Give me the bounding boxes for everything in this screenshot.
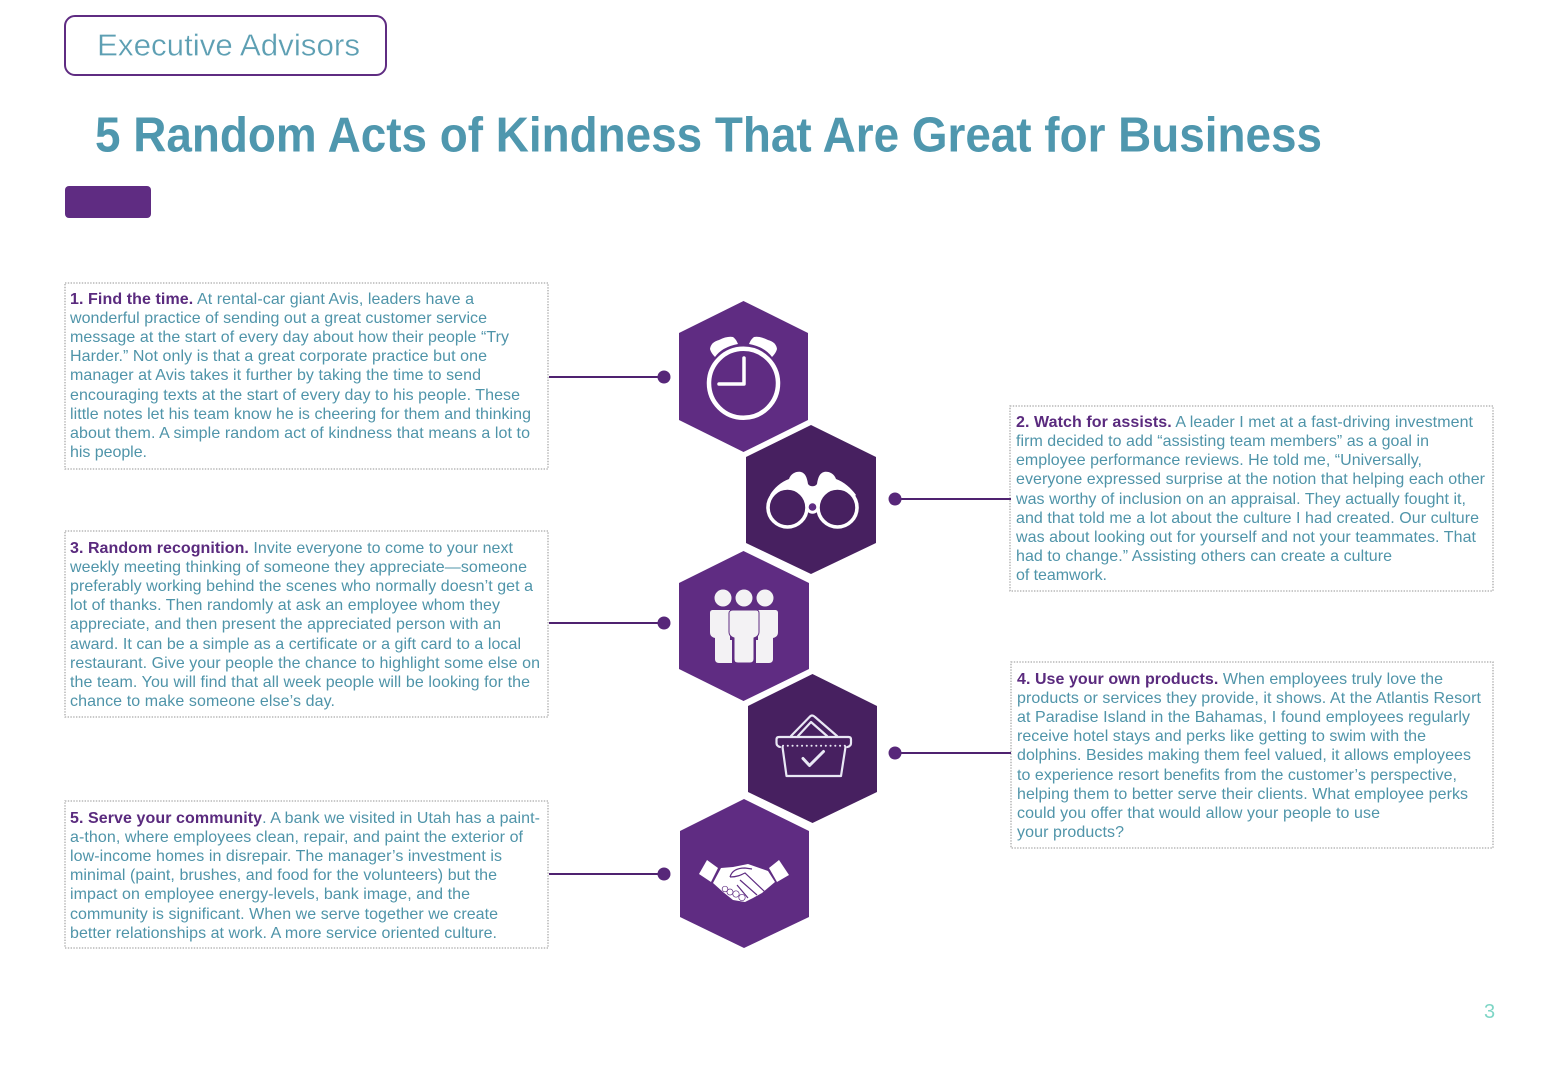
connector 1 [549, 370, 670, 384]
panel: 1. Find the time: encouraging texts at the start of every day to his people. These [70, 387, 520, 404]
panel: 3. Random recognition: lot of thanks. Then randomly at ask an employee whom they [70, 597, 500, 614]
panel: 4. Use your own products: 4. Use your own products. When employees truly love the [1017, 671, 1443, 688]
panel: 4. Use your own products: to experience resort benefits from the customer’s perspective, [1017, 767, 1457, 784]
panel: 5. Serve your community: low-income homes in disrepair. The manager’s investment is [70, 848, 502, 865]
panel: 3. Random recognition: award. It can be a simple as a certificate or a gift card to a local [70, 636, 521, 653]
panel: 4. Use your own products: dolphins. Besides making them feel valued, it allows employees [1017, 747, 1471, 764]
panel: 3. Random recognition: the team. You will find that all week people will be looking for the [70, 674, 530, 691]
panel: 1. Find the time: message at the start of every day about how their people “Try [70, 329, 509, 346]
panel: 2. Watch for assists: had to change.” Assisting others can create a culture [1016, 548, 1392, 565]
page number: 3 [1484, 1001, 1495, 1023]
panel: 1. Find the time: wonderful practice of sending out a great customer service [69, 310, 487, 327]
panel: 5. Serve your community: community is significant. When we serve together we create [70, 906, 498, 923]
panel: 2. Watch for assists: firm decided to add “assisting team members” as a goal in [1016, 433, 1429, 450]
panel: 1. Find the time: Harder.” Not only is that a great corporate practice but one [70, 348, 487, 365]
panel: 1. Find the time: his people. [70, 444, 147, 461]
panel: 2. Watch for assists: employee performance reviews. He told me, “Universally, [1016, 452, 1422, 469]
panel: 5. Serve your community: a-thon, where employees clean, repair, and paint the exterior of [70, 829, 524, 846]
panel: 5. Serve your community: better relationships at work. A more service oriented culture. [70, 925, 497, 942]
panel: 3. Random recognition: weekly meeting thinking of someone they appreciate—someone [69, 559, 527, 576]
hexagon 2 with binoculars icon [746, 425, 876, 574]
hexagon 5 with handshake icon [680, 799, 809, 948]
header badge: Executive Advisors: Executive Advisors [97, 28, 360, 62]
panel: 2. Watch for assists: was about looking out for yourself and not your teammates. That [1015, 529, 1477, 546]
panel: 3. Random recognition: restaurant. Give your people the chance to highlight some else on [70, 655, 540, 672]
panel: 3. Random recognition: preferably working behind the scenes who normally doesn’t get a [70, 578, 533, 595]
panel: 5. Serve your community [65, 801, 548, 948]
panel: 2. Watch for assists: was worthy of inclusion on an appraisal. They actually fought it, [1015, 491, 1466, 508]
panel: 5. Serve your community: minimal (paint, brushes, and food for the volunteers) but the [70, 867, 497, 884]
panel: 3. Random recognition: appreciate, and then present the appreciated person with an [70, 616, 501, 633]
hexagon 4 with shopping basket icon [748, 674, 877, 823]
panel: 2. Watch for assists: of teamwork. [1016, 567, 1107, 584]
header badge: Executive Advisors [65, 16, 386, 75]
connector 3 [549, 616, 670, 630]
panel: 1. Find the time: about them. A simple random act of kindness that means a lot to [70, 425, 530, 442]
panel: 1. Find the time: 1. Find the time. At rental-car giant Avis, leaders have a [70, 291, 474, 308]
panel: 2. Watch for assists: and that told me a lot about the culture I had created. Our culture [1016, 510, 1479, 527]
panel: 1. Find the time: little notes let his team know he is cheering for them and thinking [70, 406, 531, 423]
panel: 4. Use your own products [1011, 662, 1493, 848]
panel: 2. Watch for assists: everyone expressed surprise at the notion that helping each other [1016, 471, 1486, 488]
panel: 1. Find the time: manager at Avis takes it further by taking the time to send [70, 367, 481, 384]
connector 4 [888, 746, 1011, 760]
hexagon 3 with team icon [679, 551, 809, 701]
connector 5 [549, 868, 670, 880]
panel: 4. Use your own products: receive hotel stays and perks like getting to swim with the [1017, 728, 1426, 745]
panel: 2. Watch for assists [1010, 406, 1493, 591]
panel: 5. Serve your community: 5. Serve your community. A bank we visited in Utah has a paint- [70, 810, 540, 827]
panel: 4. Use your own products: products or services they provide, it shows. At the Atlantis Resort [1017, 690, 1482, 707]
panel: 4. Use your own products: could you offer that would allow your people to use [1017, 805, 1380, 822]
panel: 3. Random recognition: 3. Random recognition. Invite everyone to come to your next [70, 540, 514, 557]
panel: 5. Serve your community: impact on employee energy-levels, bank image, and the [70, 886, 470, 903]
connector 2 [888, 492, 1011, 506]
panel: 1. Find the time [65, 283, 548, 469]
panel: 2. Watch for assists: 2. Watch for assists. A leader I met at a fast-driving investment [1016, 414, 1474, 431]
panel: 4. Use your own products: at Paradise Island in the Bahamas, I found employees regularly [1017, 709, 1470, 726]
panel: 4. Use your own products: your products? [1017, 824, 1124, 841]
title: 5 Random Acts of Kindness That Are Great for Business [95, 108, 1322, 162]
panel: 3. Random recognition: chance to make someone else’s day. [70, 693, 335, 710]
panel: 4. Use your own products: helping them to better serve their clients. What employee perks [1017, 786, 1468, 803]
accent bar [65, 186, 151, 218]
panel: 3. Random recognition [65, 531, 548, 717]
hexagon 1 with alarm clock icon [679, 301, 808, 452]
